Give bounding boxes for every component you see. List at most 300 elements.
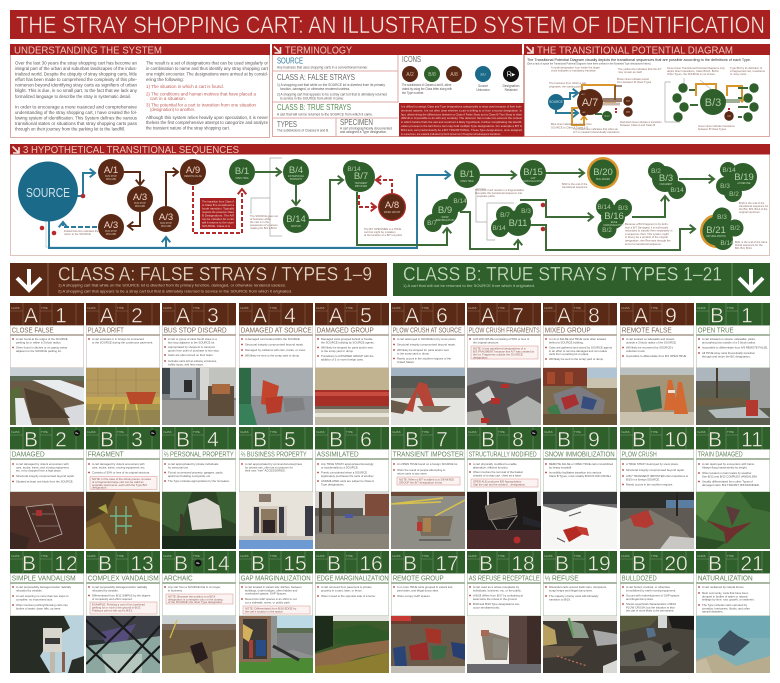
card: A2 plaza drift: A <box>100 304 114 328</box>
sequence arrows: class a <box>46 172 450 248</box>
text block: left column: integral part of the urban and suburban landscapes of the indus- <box>15 66 138 71</box>
card: B12 simple vandalism: complete; no improvised acts. <box>16 597 53 601</box>
card: B11 train damaged: damaged carts: B/2 TRANSIT, B/8 MODIFIED. <box>702 483 760 487</box>
note: dashed line return: return to the SOURCE <box>64 232 91 236</box>
card: B11 train damaged: Often located on train tracks by weather. <box>702 471 752 475</box>
card: B11 train damaged: See B/12 and B/13 COMPLEX VANDALISM. <box>702 474 758 478</box>
card: A8 mixed group: CLASS <box>544 306 553 310</box>
card: B13 complex vandalism: relocated by vandals. <box>92 588 119 592</box>
card: A6 plow crush at source: PLOW CRUSH AT SOURCE <box>393 326 462 334</box>
definition: types: TYPES <box>277 120 297 129</box>
card: A9 remote false: A <box>634 304 648 328</box>
card: B11 train damaged: CLASS <box>697 430 706 434</box>
card: A2 plaza drift <box>86 303 160 425</box>
node cluster: B/11 <box>491 203 533 237</box>
card: B10 plow crush: TYPE <box>651 430 658 434</box>
node cluster: B/11: B/3 <box>521 208 531 215</box>
card: B6 assimilated: Purely coincidental when a SOURCE <box>321 470 367 474</box>
node: B/1 second <box>454 162 525 198</box>
card: A4 damaged at source: A damaged cart located within the SOURCE <box>245 337 300 341</box>
node cluster: B/9: B/7 <box>427 220 437 227</box>
card: B1 open true: 1 <box>741 304 753 328</box>
node cluster: B/19: original specimen. <box>739 210 761 214</box>
card: B14 archaic: designation is contingent only on the closing <box>168 597 223 601</box>
card: B15 gap marginalization: overlooked spaces: GAP Spaces. <box>245 592 287 596</box>
card: A1 close false: adjacent to the SOURCE parking lot. <box>16 349 62 353</box>
card: B14 archaic: of the SOURCE; the other Type designation. <box>168 600 223 604</box>
diagram: B/3: between B Class Types. <box>698 127 727 131</box>
card: A6 plow crush at source: United States. <box>397 360 415 364</box>
card: B13 complex vandalism: parking lot or roof to the ground is B/13. <box>92 605 141 609</box>
card: A5 damaged group: A <box>329 304 343 328</box>
card: B10 plow crush: Rarely occurs in the southern regions. <box>626 482 673 486</box>
nodes: class b first row: 2/3 PERSONAL <box>288 175 305 178</box>
text block: left column: In order to encourage a more nuanced and comprehensive <box>15 104 138 110</box>
card: B4 personal property: apartment building courtyards, etc. <box>168 474 211 478</box>
card: A6 plow crush at source: Will likely be stripped for parts and/or sent <box>397 348 449 352</box>
red note: designation assignment: fact, determining the differences between a Class A False Stray and a Class B True Stray is often <box>401 112 522 116</box>
definition: types: The subdivisions of Classes A and B. <box>277 128 329 132</box>
card: A9 remote false: A cart located on sidewalks and streets <box>626 337 675 341</box>
node: B/20 <box>562 157 619 189</box>
icon: down arrow <box>739 269 763 290</box>
nodes: class a sequence: DISCARD <box>161 225 172 228</box>
card: B12 simple vandalism: CLASS <box>11 554 20 558</box>
card: B14 archaic: Any cart from a SOURCE that is no longer <box>168 585 220 589</box>
card: B8 structurally modified: TYPE <box>498 430 505 434</box>
card: A3 bus stop discard: A <box>176 304 190 328</box>
card: B13 complex vandalism <box>76 551 160 676</box>
text block: left column: lowing system of identification. This System defines the various <box>15 116 137 120</box>
node cluster: B/9: B/9 <box>438 205 452 216</box>
card: B6 assimilated: TYPE <box>346 430 353 434</box>
card: A2 plaza drift: 2 <box>131 304 143 328</box>
card: B10 plow crush: PLOW CRUSH <box>622 450 657 458</box>
node: B/20: transitional sequence. <box>562 185 588 189</box>
section: hypothetical transitional sequences <box>10 144 770 256</box>
card: B18 as refuse receptacle: occur simultaneously. <box>473 605 500 609</box>
definition: class a: CLASS A: FALSE STRAYS <box>277 73 355 82</box>
card: B3 fragment <box>86 427 160 549</box>
diagram: A/7: A/4 <box>581 93 585 96</box>
card: B7 transient imposter <box>391 427 465 549</box>
card: A7 plow crush fragments: A PLOW CRUSH consisting of 50% or less of <box>473 337 529 341</box>
heading: terminology: TERMINOLOGY <box>285 46 352 56</box>
card: B8 structurally modified: CLASS <box>468 430 477 434</box>
card: A6 plow crush at source: TYPE <box>422 306 429 310</box>
card: A4 damaged at source: 4 <box>284 304 296 328</box>
nodes: class b first row: possession of a person, <box>250 223 279 227</box>
nodes: class a sequence: BUS STOP <box>105 231 117 233</box>
card: B7 transient imposter: Often the result of people attempting to <box>397 468 446 472</box>
node: B/1 second: that splits the transitional sequence into <box>475 191 523 195</box>
diagram: B/3 <box>665 66 765 131</box>
red note: transition from class a to b: will it returns to the store <box>202 220 234 224</box>
node cluster: B/16: MARGINALIZATION <box>604 224 625 227</box>
diagram: A/7: A small designation Icon inside the larger <box>551 66 600 70</box>
definition: class a: 2) A shopping cart that appears to be a stray cart but that is ultimately returned <box>277 92 387 96</box>
class a banner: 2) A shopping cart that appears to be a stray cart but that is ultimately returned to service in the SOURCE from which it originated. <box>58 289 292 293</box>
card: B8 structurally modified: alternative, efficient function. <box>473 465 509 469</box>
node cluster: B/21: B/21 <box>706 225 726 236</box>
card: A3 bus stop discard: A cart or group of carts found close to a <box>168 337 217 341</box>
card: A5 damaged group: Will likely be stripped for parts and/or sent <box>321 346 373 350</box>
card: A9 remote false: REMOTE FALSE <box>622 326 672 334</box>
nodes: class b first row: ARCHAIC <box>291 225 302 228</box>
card: B11 train damaged: A cart destroyed by encounters with trains. <box>702 462 755 466</box>
node: B/15 <box>520 160 546 186</box>
card: B16 edge marginalization: TYPE <box>346 554 353 558</box>
card: B5 business property: 5 <box>284 428 296 452</box>
text block: right column: 1) The situation in which a cart is found. <box>146 84 224 89</box>
card: B21 naturalization: 21 <box>740 552 764 576</box>
definition: specimen: A cart photographically documented <box>340 126 392 130</box>
card: A8 mixed group: behind a SOURCE building. <box>549 340 584 344</box>
card: B1 open true: B <box>710 304 724 328</box>
card: B16 edge marginalization: B <box>327 552 341 576</box>
card: B4 personal property: A cart appropriated by private individuals <box>168 462 219 466</box>
icons legend: viated by using the Class letter along with <box>402 87 452 91</box>
card: B8 structurally modified: A cart physically modified to enable <box>473 462 517 466</box>
card: B8 structurally modified <box>467 427 541 549</box>
card: A8 mixed group: Will likely be sent to the scrap yard or dump. <box>549 357 604 361</box>
card: B2 damaged: DAMAGED <box>12 450 45 458</box>
class b banner: CLASS B: TRUE STRAYS / TYPES 1–21 <box>403 264 722 286</box>
diagram: A/7: may remain as itself <box>618 70 642 74</box>
card: B2 damaged: etc. or by dropped from a high place. <box>16 469 62 473</box>
card: B2 damaged: Situated at least one block from the SOURCE. <box>16 480 74 484</box>
card: B1 open true: All TRUE stray carts theoretically transition <box>702 351 755 355</box>
card: A5 damaged group: 5 <box>360 304 372 328</box>
card: B8 structurally modified: B <box>481 428 495 452</box>
card: B17 remote group <box>391 551 465 673</box>
card: B15 gap marginalization: TYPE <box>270 554 277 558</box>
diagram intro text: The Transitional Potential Diagram visually depicts the transitional sequences that are possible according to the definitions of each Type. <box>527 58 751 62</box>
card: B21 naturalization: natural disasters. <box>702 610 724 614</box>
node cluster: B/3: B/2 <box>651 168 661 175</box>
diagram: A/7: A/7 is created it theoretically transitions <box>573 130 620 134</box>
node: B/20: B/20 <box>593 167 613 178</box>
nodes: class a sequence: DISCARD <box>106 233 117 236</box>
card: B15 gap marginalization <box>239 551 313 673</box>
card: A6 plow crush at source: A cart destroyed in SOURCE lot by snow plows. <box>397 337 457 341</box>
panel: understanding the system <box>10 44 270 138</box>
definition: specimen: SPECIMEN <box>340 118 373 127</box>
diagram: A/7: circle indicates a mandatory transition <box>551 68 596 72</box>
card: A5 damaged group: TYPE <box>346 306 353 310</box>
card: B15 gap marginalization: 15 <box>283 552 307 576</box>
definition: specimen: and assigned a Type designation. <box>340 130 387 134</box>
card: A6 plow crush at source: Structural integrity compromised beyond repair. <box>397 342 456 346</box>
card: B17 remote group: B <box>403 552 417 576</box>
node cluster: B/21: itional sequence for the <box>735 243 763 247</box>
card: B6 assimilated: ASSIMILATED <box>317 450 359 458</box>
red note: transition from class a to b: requires the presence Class <box>202 210 234 214</box>
text block: right column: in combination to name and thus identify any stray shopping cart <box>146 66 269 71</box>
class a banner: CLASS A: FALSE STRAYS / TYPES 1–9 <box>58 264 372 286</box>
card: B12 simple vandalism: An act requiring no more than two steps to <box>16 594 69 598</box>
card: B20 bulldozed: Occurs with redevelopment of GAP spaces <box>626 594 680 598</box>
node cluster: B/21 <box>700 208 768 250</box>
diagram: A/7: SOURCE to Class A Types 1-9 <box>551 125 588 129</box>
heading: sequences: 3 HYPOTHETICAL TRANSITIONAL SEQUENCES <box>23 145 239 156</box>
diagram: A/7: from between B Class Types <box>617 80 652 84</box>
node cluster: B/3: B/3 <box>659 173 673 184</box>
card: B21 naturalization: dumped in bodies of water or natural <box>702 594 748 598</box>
card: B16 edge marginalization: property in a yard, lawn, or fence. <box>321 588 363 592</box>
card: B16 edge marginalization: EDGE MARGINALIZATION <box>317 574 389 582</box>
card: B5 business property: B <box>253 428 267 452</box>
icons legend: the Type number. <box>402 91 424 95</box>
node: B/1 second: separate paths. <box>477 194 496 198</box>
red note: B/3 fragment: end of a transitional sequence. <box>625 242 662 246</box>
card: B9 snow immobilization: CLASS <box>544 430 553 434</box>
nodes: class b first row: OPEN TRUE <box>235 178 249 180</box>
card: B3 fragment: separate specimens, each with the Type B/3 <box>92 483 147 487</box>
card: A3 bus stop discard: Appropriated by shoppers to transport <box>168 345 215 349</box>
node: source <box>18 162 78 222</box>
card: B12 simple vandalism: B <box>22 552 36 576</box>
card: B8 structurally modified: Often involves the removal of the basket <box>473 470 523 474</box>
red note: designation assignment: B/14 and, cart predominantly be a B/7 TRANSITIONAL. These Type designations, once assigned <box>401 128 522 132</box>
card: A1 close false: 1 <box>55 304 67 328</box>
card: B21 naturalization: A cart reclaimed by natural forces. <box>702 585 745 589</box>
card: B3 fragment: cars, trucks, trains, moving equipment, etc. <box>92 465 145 469</box>
card: B21 naturalization <box>696 551 770 673</box>
red note: B/3 fragment: in theory be a product of the original <box>625 235 668 239</box>
nodes: class a sequence: DISCARD <box>135 205 146 208</box>
text block: right column: the transient nature of the stray shopping cart. <box>146 125 230 130</box>
card: B6 assimilated: CLASS <box>316 430 325 434</box>
card: B20 bulldozed: immobilized by earth moving equipment. <box>626 588 676 592</box>
node cluster: B/21: B/21 is the end of the trans- <box>735 240 768 244</box>
nodes: class a sequence: REMOTE FALSE <box>184 175 202 178</box>
definition: class b: CLASS B: TRUE STRAYS <box>277 103 351 112</box>
card: A4 damaged at source: Structural integrity compromised beyond repair. <box>245 342 304 346</box>
card: A7 plow crush fragments: TYPE <box>498 306 505 310</box>
card: B2 damaged: CLASS <box>11 430 20 434</box>
nodes: class a sequence: A/3 <box>133 192 147 203</box>
card: A3 bus stop discard <box>162 303 236 425</box>
card: B2 damaged: cars, trucks, trains, and moving equipment, <box>16 465 70 469</box>
card: B9 snow immobilization: Immobility facilitates transition into various <box>549 470 602 474</box>
card: B5 business property: ⅔ BUSINESS PROPERTY <box>241 450 307 458</box>
node: B/1 second: The plow crush results in a fragmentation <box>475 188 525 192</box>
node cluster: B/3 <box>648 162 686 199</box>
class b banner <box>393 263 770 296</box>
card: B19 refuse: TYPE <box>574 554 581 558</box>
diagram: A/7: between Class A and Class B <box>620 123 655 127</box>
card: B12 simple vandalism: TYPE <box>41 554 48 558</box>
text block: left column: understanding of the stray shopping cart, I have created the fol- <box>15 110 138 115</box>
icons legend: R▸ <box>507 72 516 78</box>
card: B3 fragment: CLASS <box>87 430 96 434</box>
card: B5 business property: for private use, often as a customer for <box>245 465 293 469</box>
card: A6 plow crush at source <box>391 303 465 425</box>
card: B3 fragment: FRAGMENT <box>88 450 124 458</box>
node cluster: B/19 <box>716 162 768 214</box>
card: B10 plow crush: A TRUE STRAY destroyed by snow plows. <box>626 462 679 466</box>
text block: right column: (designation) to another. <box>150 107 195 112</box>
card: A3 bus stop discard: Includes carts left at subway entrances, <box>168 359 217 363</box>
node cluster: B/3: B/14 <box>670 187 684 194</box>
card: B19 refuse: ⅓ REFUSE <box>545 574 579 582</box>
card: B4 personal property: 4 <box>207 428 219 452</box>
red note: designation assignment <box>399 103 524 136</box>
card: B20 bulldozed: Shows superficial characteristics of B/10 <box>626 602 676 606</box>
card: B2 damaged <box>10 427 84 549</box>
icons legend: A/8 <box>450 72 458 78</box>
icons legend <box>402 55 520 95</box>
card: A6 plow crush at source: CLASS <box>392 306 401 310</box>
node cluster: B/16: B/2 <box>602 227 612 234</box>
node cluster: B/7 <box>343 160 375 192</box>
text block: left column: through on their journey from the parking lot to the landfill. <box>15 126 125 132</box>
card: B15 gap marginalization: GAP MARGINALIZATION <box>241 574 311 582</box>
node cluster: B/11: B/14 <box>492 225 506 232</box>
card: B15 gap marginalization: CLASS <box>240 554 249 558</box>
diagram: A/7: B/14 <box>605 115 610 118</box>
definition: class a: 1) A shopping cart that while on the SOURCE lot is diverted from its primary <box>277 83 385 87</box>
node cluster: B/16: B/3 <box>618 205 628 212</box>
card: B14 archaic: TYPE <box>193 554 200 558</box>
card: B6 assimilated: 6 <box>360 428 372 452</box>
card: B14 archaic: ARCHAIC <box>164 574 193 582</box>
card: A1 close false: TYPE <box>41 306 48 310</box>
card: B17 remote group: 3 or more TRUE carts grouped in vacant lots, <box>397 585 453 589</box>
card: B5 business property: their own "free" ACCESSORIES. <box>245 469 286 473</box>
card: B10 plow crush: B <box>632 428 646 452</box>
card: B11 train damaged: TYPE <box>727 430 734 434</box>
card: A8 mixed group: A <box>557 304 571 328</box>
card: A9 remote false: TYPE <box>651 306 658 310</box>
nodes: class a sequence: A/3 <box>159 212 173 223</box>
diagram: B/3: a fragmented cart, transitions <box>730 69 765 73</box>
card: B13 complex vandalism: Putting a cart on the roof is B/13. <box>92 608 133 612</box>
card: B11 train damaged: B <box>708 428 722 452</box>
card: B12 simple vandalism: relocated by vandals. <box>16 588 43 592</box>
node: A/8: A/8 <box>385 200 399 211</box>
card: B3 fragment: 3 <box>131 428 143 452</box>
card: B20 bulldozed: PLOW CRUSH; but the situation is that <box>626 605 675 609</box>
card: A5 damaged group: Transitions to A/8 MIXED GROUP with the <box>321 354 374 358</box>
card: B15 gap marginalization: Moved into GAP spaces in an effort to not <box>245 597 297 601</box>
node: B/15: GAP <box>531 177 536 180</box>
definition: source <box>277 56 368 70</box>
red note: transition from class a to b: SOURCE. Class A is <box>202 224 231 228</box>
card: B6 assimilated: B <box>329 428 343 452</box>
card: B17 remote group: yard sides, and illegal dump sites. <box>397 588 439 592</box>
red note: designation assignment: difficult or impossible to do with any certainty. The observer has to take into account the context <box>401 116 522 120</box>
icon: designation retained: R▸ <box>151 431 155 435</box>
card: A5 damaged group <box>315 303 389 425</box>
card: B6 assimilated: Type designations. <box>321 482 345 486</box>
card: B17 remote group: 17 <box>435 552 459 576</box>
nodes: class a sequence: BUS STOP <box>160 223 172 225</box>
card: B2 damaged: Structural integrity compromised beyond repair. <box>16 474 75 478</box>
card: A7 plow crush fragments: the lot. Fragments outside the SOURCE <box>473 352 523 356</box>
nodes: class b first row: B/1 <box>235 166 249 177</box>
card: B14 archaic: B <box>174 552 188 576</box>
card: B3 fragment: Consists of 50% or less of its original structure. <box>92 470 150 474</box>
card: B7 transient imposter: TRANSIENT IMPOSTER <box>393 450 464 458</box>
class b banner: 1) A cart that will not be returned to the SOURCE from which it originated. <box>403 284 535 288</box>
text block: left column: nomenon beyond identifying stray carts as signifiers of urban <box>15 83 138 88</box>
card: A1 close false: CLASS <box>11 306 20 310</box>
card: B13 complex vandalism: Differentiated from B/12 SIMPLE by the degree <box>92 594 151 598</box>
card: A8 mixed group <box>543 303 617 425</box>
sequence arrows: class b <box>251 158 714 250</box>
card: B4 personal property: Found on personal property: garages, yards, <box>168 470 223 474</box>
card: B10 plow crush: A B/7 TRANSIENT IMPOSTER often transitions to <box>626 474 689 478</box>
node cluster: B/16: EDGE <box>611 222 618 224</box>
card: B13 complex vandalism: of complexity and effort required. <box>92 597 133 601</box>
card: B14 archaic: in business. <box>168 588 183 592</box>
card: B7 transient imposter: CLASS <box>392 430 401 434</box>
panel: transitional potential diagram <box>524 44 770 136</box>
icons legend: Unknown <box>476 88 490 92</box>
card: B1 open true: through and return the B/1 designation. <box>702 354 751 358</box>
definition: class a: to service in the SOURCE from which it came. <box>280 96 344 100</box>
card: B1 open true: and parking lots outside of a 3 block radius. <box>702 340 756 344</box>
card: B13 complex vandalism: A cart purposefully damaged and/or radically <box>92 585 148 589</box>
text block: right column: ering the following: <box>146 77 184 82</box>
text block: right column: one might encounter. The designations were arrived at by consid- <box>146 72 269 77</box>
card: A3 bus stop discard: trolley stops, and ferry stops. <box>168 362 204 366</box>
card: A7 plow crush fragments: B/3 FRAGMENT because this A/7 was created at <box>473 350 534 354</box>
card: B2 damaged: 2 <box>55 428 67 452</box>
card: B20 bulldozed: TYPE <box>651 554 658 558</box>
red note: transition from class a to b: B Designations. The A/9 <box>202 214 234 218</box>
icon: designation retained: R▸ <box>196 561 200 565</box>
diagram: A/7: SOURCE <box>549 100 563 104</box>
diagram intro text <box>527 58 751 66</box>
card: B13 complex vandalism: EXAMPLE: Pushing a cart off an overhead <box>92 602 145 606</box>
red note: transition from class a to b: to Class B is considered a <box>202 203 234 207</box>
node: B/20: B/20 is the end of the <box>562 182 588 186</box>
node cluster: B/7: IMPOSTER <box>355 186 367 188</box>
icons legend: The subdivisions of Classes A and B, abbre- <box>402 83 452 87</box>
node cluster: B/11: B/11 <box>509 218 527 229</box>
card: A5 damaged group: to the scrap yard or dump. <box>321 349 354 353</box>
card: B18 as refuse receptacle <box>467 551 541 673</box>
nodes: class a sequence: DISCARD <box>106 178 117 181</box>
card: A1 close false: A cart found at the edges of the SOURCE <box>16 337 68 341</box>
card: B19 refuse: 19 <box>587 552 611 576</box>
node cluster: B/7: TRANSIENT <box>354 182 368 185</box>
card: A4 damaged at source: Damaged by collisions with cars, trucks, or snow. <box>245 348 306 352</box>
node cluster: B/21: B/3 <box>717 214 727 221</box>
card: B9 snow immobilization: 9 <box>588 428 600 452</box>
text block: right column: 3) The potential for a cart to transition from one situation <box>146 103 257 108</box>
definition: specimen <box>340 118 392 134</box>
card: B19 refuse: scrap heaps and illegal dump sites. <box>549 588 593 592</box>
node cluster: B/19: B/19 is the end of the <box>739 201 765 205</box>
card: B9 snow immobilization: TYPE <box>574 430 581 434</box>
heading: diagram: THE TRANSITIONAL POTENTIAL DIAGRAM <box>537 46 733 56</box>
card: B14 archaic <box>162 551 236 673</box>
card: A3 bus stop discard: Carts are often turned on their sides. <box>168 353 214 357</box>
card: B10 plow crush: 10 <box>664 428 688 452</box>
diagram: A/7: originates; the starting point. <box>549 84 583 88</box>
card: B17 remote group: REMOTE GROUP <box>393 574 444 582</box>
card: B7 transient imposter: GROUP the B/7 designation is lost. <box>399 480 443 484</box>
card: B14 archaic: CLASS <box>163 554 172 558</box>
card: B15 gap marginalization: B <box>251 552 265 576</box>
card: B18 as refuse receptacle: B <box>479 552 493 576</box>
card: A8 mixed group: MIXED GROUP <box>545 326 591 334</box>
card: A1 close false: A <box>24 304 38 328</box>
